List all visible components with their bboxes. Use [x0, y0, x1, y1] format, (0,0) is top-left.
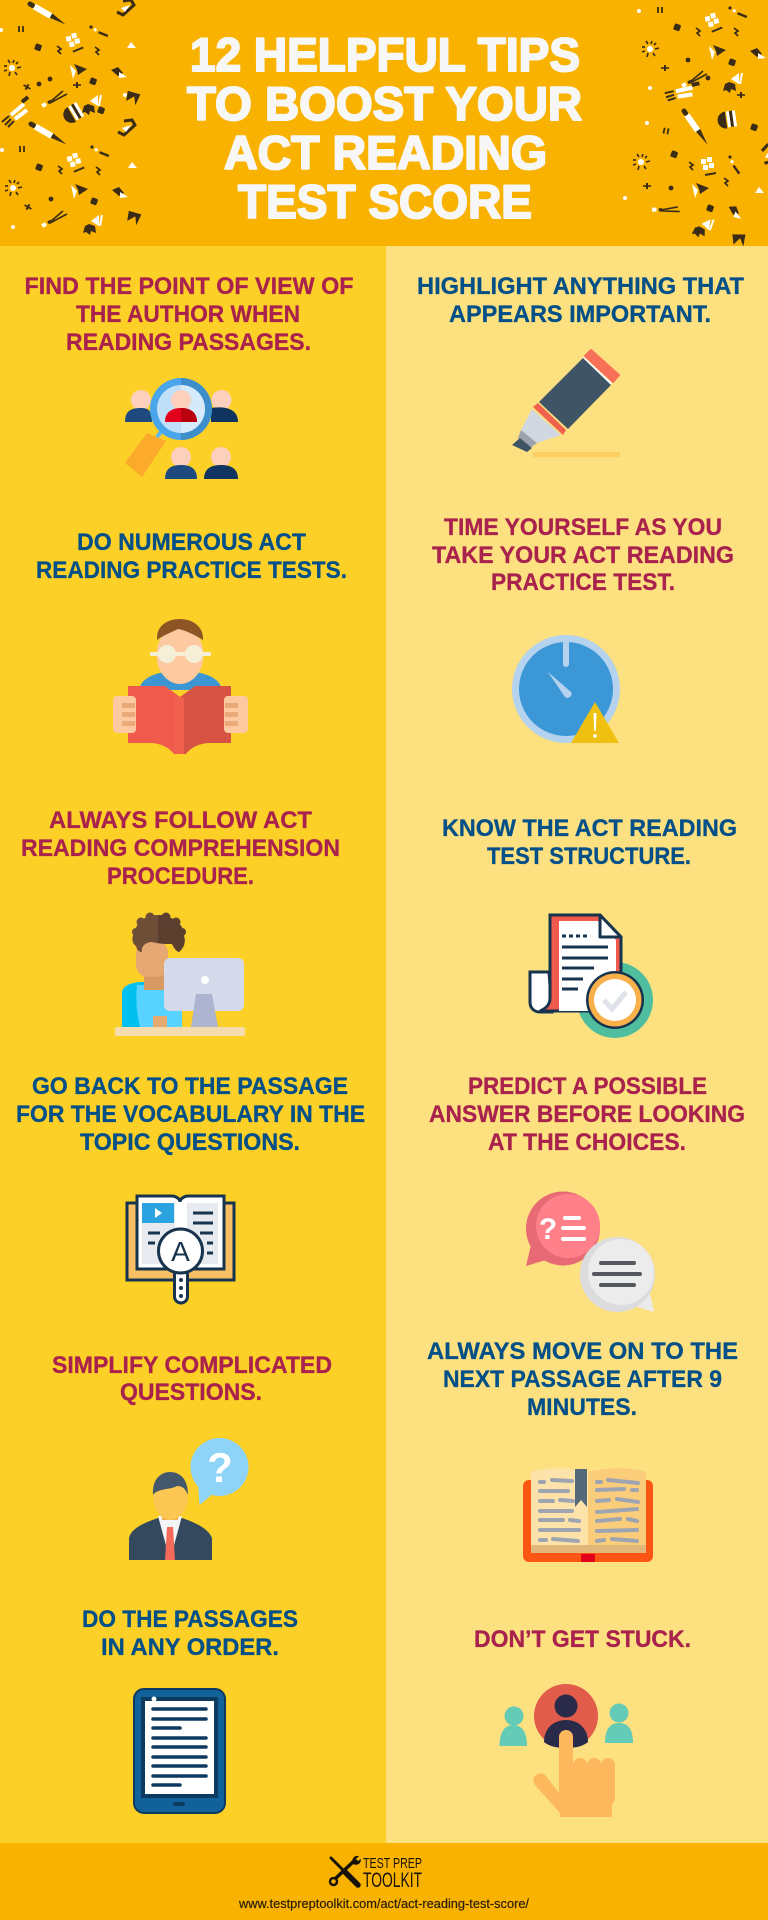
panel: tip 8 predict answer — [429, 1073, 745, 1312]
icon: stopwatch with warning — [512, 635, 620, 743]
heading: tip 5: PROCEDURE. — [107, 863, 254, 890]
heading: tip 6: KNOW THE ACT READING — [442, 815, 737, 842]
heading: tip 8: ANSWER BEFORE LOOKING — [429, 1101, 745, 1128]
heading: tip 5: ALWAYS FOLLOW ACT — [49, 807, 312, 834]
confetti left — [0, 0, 141, 235]
heading: tip 5: READING COMPREHENSION — [21, 835, 340, 862]
heading: tip 4: TAKE YOUR ACT READING — [432, 542, 734, 569]
panel: tip 10 move on — [427, 1338, 738, 1562]
panel: tip 5 comprehension procedure — [21, 807, 340, 1036]
confetti right — [623, 6, 768, 250]
footer band — [0, 1843, 768, 1920]
panel: tip 6 test structure — [442, 815, 737, 1038]
icon: document with seal — [530, 915, 653, 1038]
heading: tip 1: READING PASSAGES. — [66, 329, 311, 356]
icon: book with magnifier A: A — [171, 1236, 190, 1267]
heading: tip 11: IN ANY ORDER. — [101, 1634, 279, 1661]
heading: tip 7 — [16, 1073, 365, 1156]
icon: book with magnifier A — [127, 1196, 234, 1303]
logo: Test Prep Toolkit: TOOLKIT — [363, 1869, 422, 1892]
icon: businessman with question: ? — [207, 1444, 233, 1491]
title — [187, 28, 582, 228]
icon: speech bubbles: ? — [539, 1213, 557, 1246]
heading: tip 1: THE AUTHOR WHEN — [76, 301, 300, 328]
heading: tip 8: AT THE CHOICES. — [488, 1129, 686, 1156]
heading: tip 3 — [36, 529, 347, 584]
heading: tip 9 — [52, 1352, 332, 1406]
icon: speech bubbles — [526, 1192, 655, 1312]
heading: tip 9: QUESTIONS. — [120, 1379, 262, 1406]
panel: tip 1 point of view — [24, 273, 354, 479]
icon: e-reader tablet — [134, 1689, 225, 1813]
panel: tip 4 time yourself — [432, 514, 734, 743]
source url: www.testpreptoolkit.com/act/act-reading-test-score/ — [238, 1897, 530, 1911]
heading: tip 4: TIME YOURSELF AS YOU — [444, 514, 722, 541]
icon: businessman with question — [129, 1438, 248, 1560]
heading: tip 10: NEXT PASSAGE AFTER 9 — [443, 1366, 722, 1393]
icon: highlighter — [512, 350, 620, 457]
icon: crossed tools — [330, 1856, 361, 1885]
heading: tip 8: PREDICT A POSSIBLE — [468, 1073, 707, 1100]
heading: tip 2: APPEARS IMPORTANT. — [449, 301, 711, 328]
heading: tip 1: FIND THE POINT OF VIEW OF — [24, 273, 354, 300]
logo: Test Prep Toolkit: TEST PREP — [363, 1855, 422, 1872]
panel: tip 9 simplify — [52, 1352, 332, 1560]
heading: tip 7: FOR THE VOCABULARY IN THE — [16, 1101, 365, 1128]
heading: tip 6 — [442, 815, 737, 870]
heading: tip 10: ALWAYS MOVE ON TO THE — [427, 1338, 738, 1365]
heading: tip 2: HIGHLIGHT ANYTHING THAT — [417, 273, 744, 300]
header band — [0, 0, 768, 250]
heading: tip 7: GO BACK TO THE PASSAGE — [32, 1073, 348, 1100]
icon: student at computer — [115, 912, 245, 1036]
panel: tip 7 vocabulary — [16, 1073, 365, 1303]
title: 12 HELPFUL TIPS — [190, 28, 580, 81]
heading: tip 4 — [432, 514, 734, 596]
heading: tip 7: TOPIC QUESTIONS. — [80, 1129, 300, 1156]
heading: tip 6: TEST STRUCTURE. — [487, 843, 691, 870]
heading: tip 4: PRACTICE TEST. — [491, 569, 675, 596]
heading: tip 3: READING PRACTICE TESTS. — [36, 557, 347, 584]
heading: tip 2 — [417, 273, 744, 328]
heading: tip 3: DO NUMEROUS ACT — [77, 529, 306, 556]
heading: tip 12: DON’T GET STUCK. — [474, 1626, 691, 1653]
icon: finger selecting person — [500, 1684, 633, 1817]
heading: tip 10 — [427, 1338, 738, 1421]
icon: magnifier over people — [125, 378, 238, 479]
panel: tip 11 any order — [82, 1606, 298, 1813]
heading: tip 1 — [24, 273, 354, 356]
panel: tip 2 highlight — [417, 273, 744, 457]
heading: tip 9: SIMPLIFY COMPLICATED — [52, 1352, 332, 1379]
title: ACT READING — [224, 126, 547, 179]
logo: Test Prep Toolkit — [330, 1855, 422, 1892]
panel: tip 12 don't get stuck — [474, 1626, 691, 1817]
heading: tip 11 — [82, 1606, 298, 1661]
heading: tip 8 — [429, 1073, 745, 1156]
heading: tip 10: MINUTES. — [527, 1394, 637, 1421]
title: TO BOOST YOUR — [187, 77, 582, 130]
icon: open book — [523, 1468, 653, 1562]
heading: tip 11: DO THE PASSAGES — [82, 1606, 298, 1633]
icon: reader with book — [113, 619, 248, 754]
panel: tip 3 practice tests — [36, 529, 347, 754]
title: TEST SCORE — [238, 175, 532, 228]
heading: tip 5 — [21, 807, 340, 890]
